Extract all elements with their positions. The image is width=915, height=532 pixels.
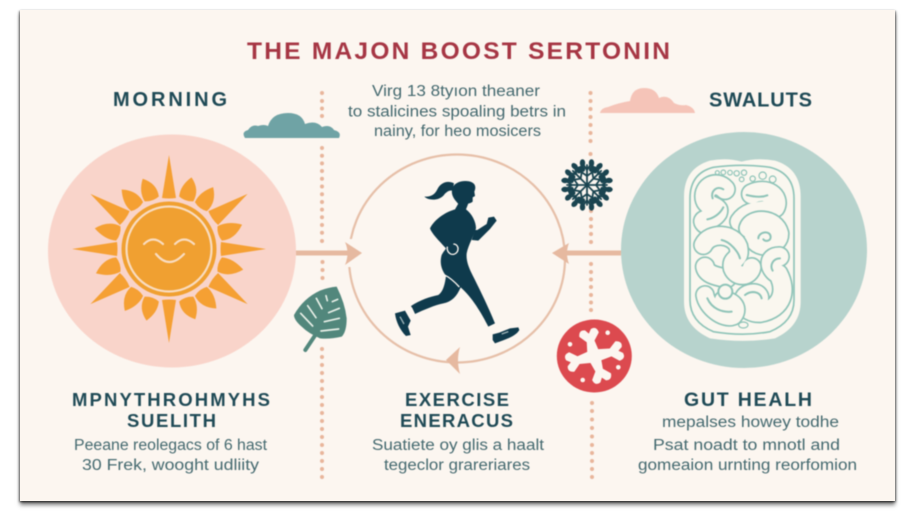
arrow: ring bottom	[446, 347, 460, 374]
sun smile	[144, 240, 194, 262]
ring gap	[345, 239, 354, 267]
intro text block	[348, 83, 566, 140]
text block: left column	[72, 389, 270, 474]
sun face disc	[122, 202, 216, 296]
heading: swaluts: SWALUTS	[709, 90, 812, 112]
right column body: mepalses howey todhe	[662, 414, 839, 431]
intro text block: to stalicines spoaling betrs in	[348, 104, 566, 120]
illustration: runner circle	[345, 154, 565, 374]
heading: morning: MORNING	[113, 89, 227, 111]
text block: centre column	[372, 389, 545, 474]
icon: pink cloud	[600, 88, 695, 113]
left column heading: MPNYTHROHMYHS	[72, 389, 270, 410]
left column heading: SUELITH	[127, 410, 216, 431]
gut illustration in rounded capsule	[684, 159, 801, 341]
intro text block: nainy, for heo mosicers	[374, 123, 541, 140]
centre column body	[372, 437, 545, 474]
title: THE MAJON BOOST SERTONIN	[247, 38, 670, 65]
illustration: sun circle	[48, 134, 296, 368]
icon: leaf	[294, 287, 347, 350]
centre column heading	[400, 389, 513, 431]
left column body: Peeane reolegacs of 6 hast	[74, 437, 268, 454]
left column body	[74, 437, 268, 474]
icon: red circle with white cross	[557, 320, 632, 392]
right column body	[638, 414, 857, 474]
dotted divider: right	[588, 91, 594, 479]
intro text block: Virg 13 8tyıon theaner	[372, 83, 540, 100]
centre column heading: ENERACUS	[400, 410, 513, 431]
illustration: gut circle	[621, 132, 867, 368]
sun rays	[72, 155, 266, 343]
arrow: sun to runner	[296, 242, 362, 265]
centre column heading: EXERCISE	[405, 389, 509, 410]
right column body: Psat noadt to mnotl and	[653, 437, 840, 454]
gut background disc	[621, 132, 867, 368]
right column body: gomeaion urnting reorfomion	[638, 457, 857, 474]
right column heading: GUT HEALH	[684, 389, 812, 411]
left column heading	[72, 389, 270, 431]
left column body: 30 Frek, wooght udliity	[82, 457, 259, 474]
text block: right column	[638, 389, 857, 474]
runner silhouette	[395, 181, 519, 343]
icon: snowflake	[562, 160, 612, 210]
infographic artwork	[48, 42, 868, 480]
centre column body: tegeclor grareriares	[384, 457, 530, 474]
icon: teal cloud	[244, 113, 340, 138]
arrow: gut to runner	[552, 243, 621, 264]
dotted divider: left	[320, 91, 324, 479]
sun background disc	[48, 134, 296, 368]
circular cycle ring	[349, 154, 565, 362]
centre column body: Suatiete oy glis a haalt	[372, 437, 545, 454]
